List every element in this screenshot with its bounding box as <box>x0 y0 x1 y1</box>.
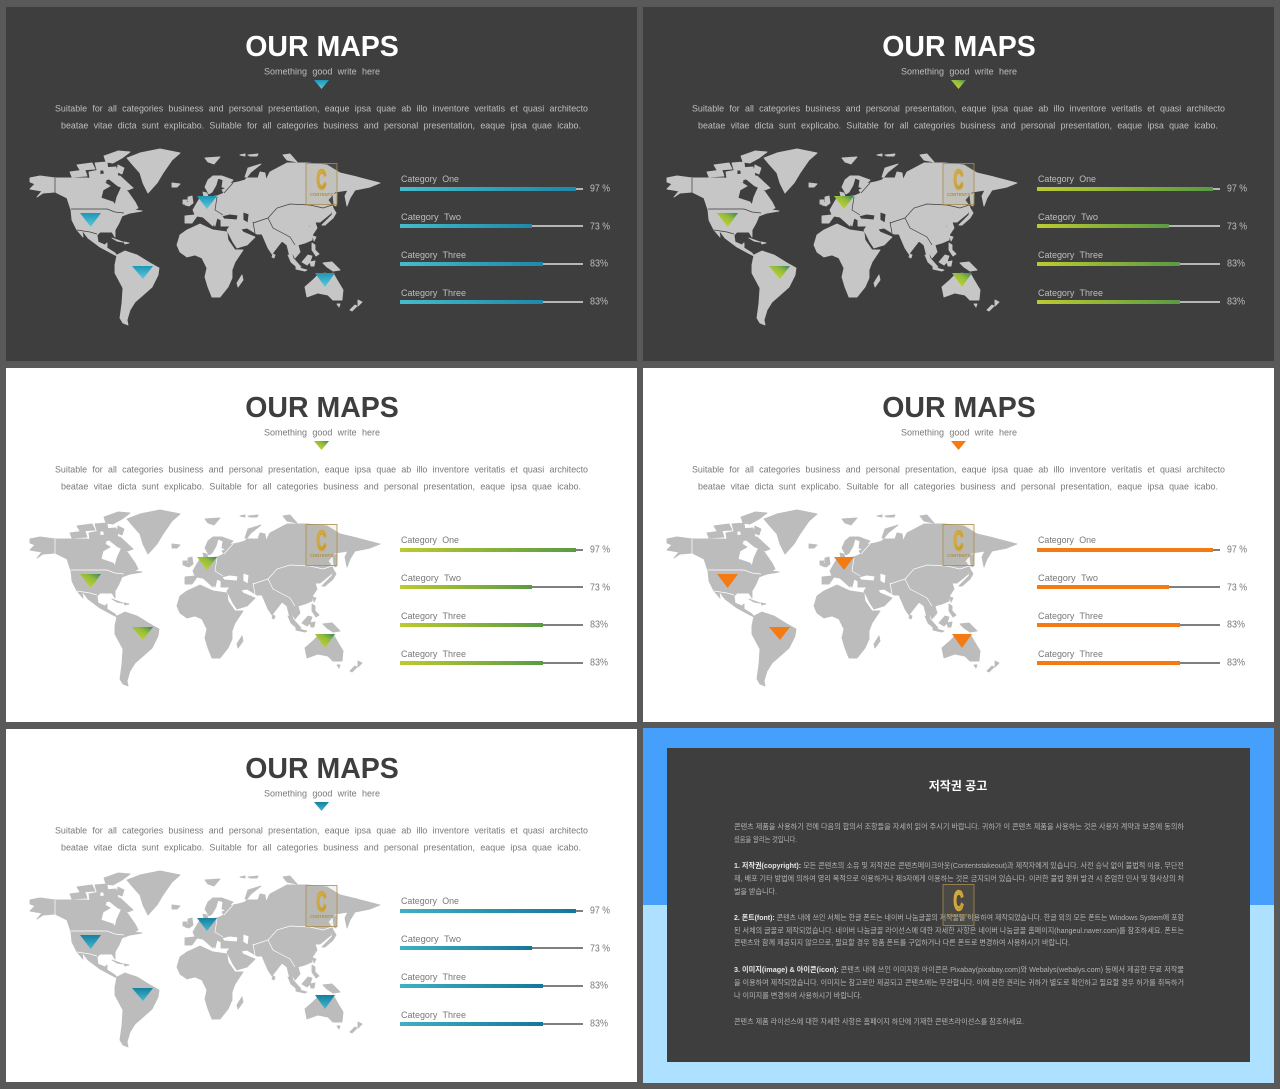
panel: dark green maps slide <box>643 7 1274 361</box>
icon: heading triangle <box>314 441 329 450</box>
icon: heading triangle <box>951 441 966 450</box>
bar chart <box>400 174 610 308</box>
bar chart: Category Two <box>401 573 461 584</box>
notice: image and icon: 을 이용하여 제작되었습니다. 이미지는 참고로만 제공되고 콘텐츠에는 무관합니다. 이에 관한 권리는 귀하가 별도로 확인하고 필요할 경우 허가를 취득하거 <box>734 977 1184 987</box>
bar chart: 83% <box>590 296 608 308</box>
panel: copyright notice <box>643 728 1274 1083</box>
body text: Suitable for all categories business and personal presentation, eaque ipsa quae ab illo inventore veritatis et quasi architecto <box>55 104 588 114</box>
title: OUR MAPS <box>245 753 399 785</box>
bar chart: 73 % <box>590 582 610 594</box>
bar chart: 83% <box>1227 620 1245 630</box>
bar chart: Category One <box>401 535 459 546</box>
logo watermark <box>943 524 974 566</box>
notice: image and icon <box>734 964 1184 1000</box>
notice: font: 된 서체의 글꼴로 제작되었습니다. 네이버 나눔글꼴 라이선스에 대한 자세한 사항은 네이버 나눔글꼴 홈페이지(hangeul.naver.com)를 참조하세요. 폰트는 <box>734 925 1184 935</box>
body text <box>55 826 588 854</box>
notice: font <box>734 912 1184 947</box>
bar chart: 97 % <box>1227 184 1247 194</box>
bar chart: 73 % <box>1227 582 1247 594</box>
world map <box>30 871 380 1047</box>
title: OUR MAPS <box>245 31 399 63</box>
map markers <box>80 196 335 287</box>
map markers <box>80 918 335 1009</box>
bar chart <box>1037 174 1247 308</box>
logo watermark <box>943 884 974 926</box>
panel: light teal maps slide <box>6 729 637 1082</box>
bar chart: 97 % <box>590 906 610 916</box>
bar chart: Category Three <box>1038 250 1103 261</box>
bar chart: 73 % <box>1227 222 1247 232</box>
logo watermark <box>306 886 337 926</box>
bar chart: 73 % <box>590 222 610 232</box>
title: OUR MAPS <box>882 392 1036 424</box>
bar chart: 97 % <box>590 184 610 194</box>
notice heading: 저작권 공고 <box>929 778 987 793</box>
bar chart: 83% <box>1227 296 1245 308</box>
body text: beatae vitae dicta sunt explicabo. Suitable for all categories business and personal presentation, eaque ipsa quae icabo. <box>61 482 581 492</box>
bar chart: Category One <box>401 174 459 185</box>
title: OUR MAPS <box>882 31 1036 63</box>
map markers <box>717 557 972 648</box>
bar chart: Category One <box>401 896 459 907</box>
bar chart: Category Two <box>401 212 461 223</box>
notice intro <box>734 821 1184 844</box>
notice: copyright <box>734 860 1184 896</box>
notice intro: 셨음을 알리는 것입니다. <box>734 834 797 844</box>
bar chart <box>400 896 610 1030</box>
bar chart: 83% <box>1227 258 1245 270</box>
body text: Suitable for all categories business and personal presentation, eaque ipsa quae ab illo inventore veritatis et quasi architecto <box>692 104 1225 114</box>
body text: Suitable for all categories business and personal presentation, eaque ipsa quae ab illo inventore veritatis et quasi architecto <box>55 464 588 476</box>
bar chart: Category Three <box>1038 611 1103 622</box>
logo watermark <box>306 524 337 566</box>
notice: copyright: 재, 배포 기타 방법에 의하여 영리 목적으로 이용하거나 제3자에게 이용하는 것은 금지되어 있습니다. 이러한 불법 행위 발견 시 준엄한 민사 및 형사상의 처 <box>734 873 1184 883</box>
notice intro: 콘텐츠 제품을 사용하기 전에 다음의 합의서 조항들을 자세히 읽어 주시기 바랍니다. 귀하가 이 콘텐츠 제품을 사용하는 것은 사용자 계약과 보증에 동의하 <box>734 821 1184 831</box>
subtitle: Something good write here <box>264 788 380 800</box>
body text: beatae vitae dicta sunt explicabo. Suitable for all categories business and personal presentation, eaque ipsa quae icabo. <box>61 120 581 132</box>
icon: heading triangle <box>314 80 329 89</box>
world map <box>667 149 1017 325</box>
body text <box>55 464 588 492</box>
icon: heading triangle <box>314 802 329 811</box>
subtitle: Something good write here <box>901 428 1017 438</box>
world map <box>30 510 380 686</box>
body text <box>55 104 588 132</box>
bar chart: 83% <box>590 620 608 630</box>
bar chart: Category Three <box>401 250 466 261</box>
panel: light orange maps slide <box>643 368 1274 722</box>
world map <box>667 510 1017 686</box>
icon: heading triangle <box>951 80 966 89</box>
bar chart: 73 % <box>590 944 610 954</box>
body text: Suitable for all categories business and personal presentation, eaque ipsa quae ab illo inventore veritatis et quasi architecto <box>692 464 1225 476</box>
bar chart: Category Three <box>401 972 466 983</box>
notice: font: 2. 폰트(font): 콘텐츠 내에 쓰인 서체는 한글 폰트는 네이버 나눔글꼴의 저작물을 이용하여 제작되었습니다. 한글 외의 모든 폰트는 Windows System에 포함 <box>734 912 1184 922</box>
notice: licence pointer: 콘텐츠 제품 라이선스에 대한 자세한 사항은 홈페이지 하단에 기재한 콘텐츠라이선스를 참조하세요. <box>734 1016 1024 1026</box>
bar chart: 83% <box>590 658 608 668</box>
map markers <box>717 196 972 287</box>
subtitle: Something good write here <box>264 428 380 438</box>
bar chart: 97 % <box>1227 544 1247 556</box>
bar chart: 83% <box>590 980 608 992</box>
panel: dark teal maps slide <box>6 7 637 361</box>
body text <box>692 464 1225 492</box>
body text <box>692 104 1225 132</box>
body text: beatae vitae dicta sunt explicabo. Suitable for all categories business and personal presentation, eaque ipsa quae icabo. <box>698 120 1218 132</box>
subtitle: Something good write here <box>901 66 1017 78</box>
logo watermark <box>943 164 974 204</box>
bar chart: 97 % <box>590 544 610 556</box>
body text: beatae vitae dicta sunt explicabo. Suitable for all categories business and personal presentation, eaque ipsa quae icabo. <box>698 482 1218 492</box>
body text: beatae vitae dicta sunt explicabo. Suitable for all categories business and personal presentation, eaque ipsa quae icabo. <box>61 842 581 854</box>
notice: font: 콘텐츠와 함께 제공되지 않으므로, 필요할 경우 정품 폰트를 구입하거나 다른 폰트로 변경하여 사용하시기 바랍니다. <box>734 937 1070 947</box>
bar chart: Category Three <box>401 288 466 299</box>
bar chart: Category Three <box>401 1010 466 1021</box>
bar chart <box>400 535 610 668</box>
subtitle: Something good write here <box>264 66 380 78</box>
notice: image and icon: 나 이미지를 변경하여 사용하시기 바랍니다. <box>734 990 862 1000</box>
bar chart: 83% <box>590 258 608 270</box>
bar chart <box>1037 535 1247 668</box>
bar chart: Category Two <box>1038 573 1098 584</box>
panel: light green maps slide <box>6 368 637 722</box>
bar chart: Category Three <box>1038 288 1103 299</box>
bar chart: Category Three <box>401 611 466 622</box>
bar chart: Category Two <box>1038 212 1098 223</box>
bar chart: Category Two <box>401 934 461 945</box>
bar chart: Category One <box>1038 174 1096 185</box>
bar chart: 83% <box>590 1018 608 1030</box>
bar chart: Category Three <box>401 649 466 660</box>
bar chart: 83% <box>1227 658 1245 668</box>
notice: copyright: 벌을 받습니다. <box>734 886 777 896</box>
map markers <box>80 557 335 648</box>
logo watermark <box>306 164 337 204</box>
notice: copyright: 1. 저작권(copyright): 모든 콘텐츠의 소유 및 저작권은 콘텐츠메이크아웃(Contentstakeout)과 제작자에게 있습니다. 사전 승낙 없이 불법적 이용, 무단전 <box>734 860 1184 870</box>
bar chart: Category Three <box>1038 649 1103 660</box>
notice: image and icon: 3. 이미지(image) & 아이콘(icon): 콘텐츠 내에 쓰인 이미지와 아이콘은 Pixabay(pixabay.com)와 Webalys(webalys.com) 등에서 제공한 무료 저작물 <box>734 964 1184 974</box>
body text: Suitable for all categories business and personal presentation, eaque ipsa quae ab illo inventore veritatis et quasi architecto <box>55 826 588 836</box>
world map <box>30 149 380 325</box>
bar chart: Category One <box>1038 535 1096 546</box>
title: OUR MAPS <box>245 392 399 424</box>
